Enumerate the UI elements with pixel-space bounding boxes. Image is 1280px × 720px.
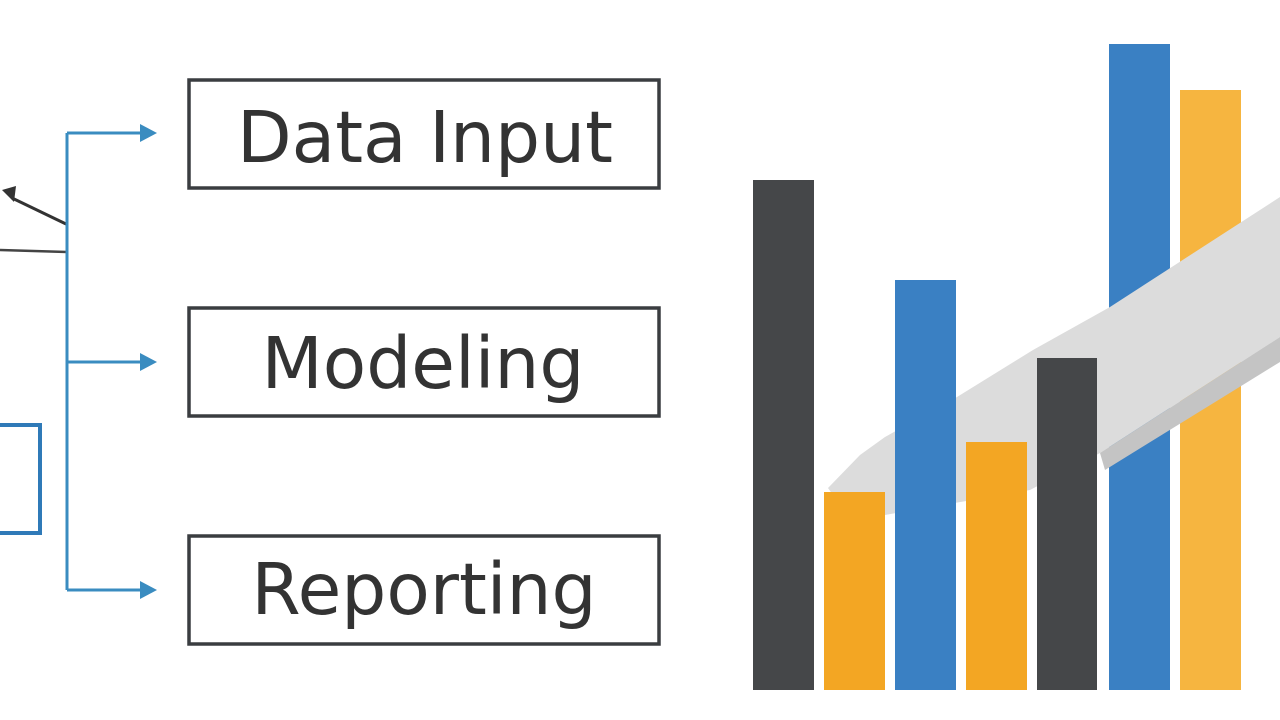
box: Reporting: Reporting — [251, 548, 597, 631]
bar chart — [753, 44, 1280, 690]
trend arrow band — [828, 197, 1280, 515]
box: Reporting — [189, 536, 659, 644]
partial blue box — [0, 425, 40, 533]
left connector lines — [0, 124, 157, 599]
box: Modeling: Modeling — [262, 322, 584, 405]
box: Modeling — [189, 308, 659, 416]
box: Data Input: Data Input — [237, 96, 613, 179]
box: Data Input — [189, 80, 659, 188]
